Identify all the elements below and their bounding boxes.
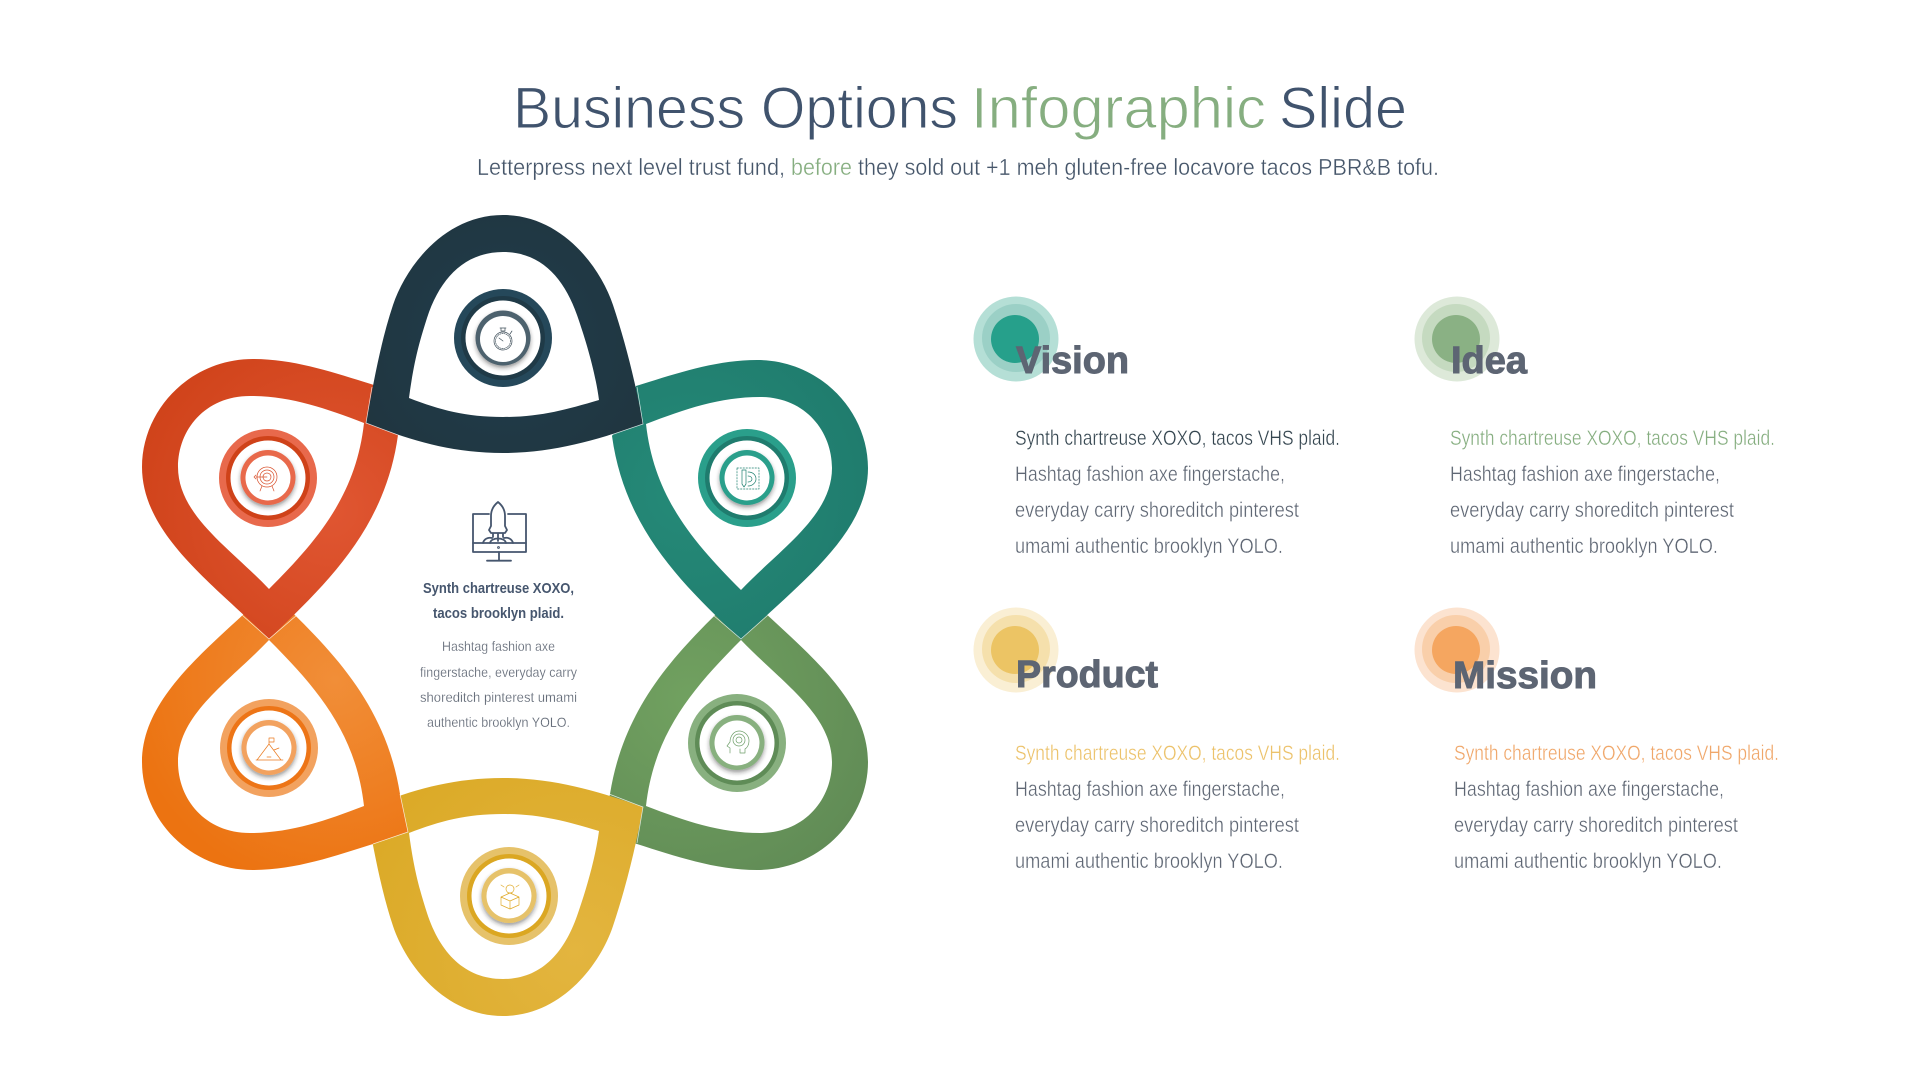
icon: teal circles	[974, 296, 1058, 382]
center body text: fingerstache, everyday carry	[420, 664, 577, 680]
title: Slide	[1279, 76, 1407, 141]
icon: orange circles	[1414, 608, 1500, 692]
badge: stopwatch	[454, 289, 552, 387]
text: vision copy: umami authentic brooklyn YOLO.	[1015, 535, 1283, 558]
title	[513, 76, 1407, 141]
petal: red	[142, 359, 398, 639]
text: vision copy: Hashtag fashion axe fingerstache,	[1015, 463, 1285, 486]
text: mission copy: umami authentic brooklyn YOLO.	[1454, 850, 1722, 873]
text: product copy: Hashtag fashion axe fingerstache,	[1015, 778, 1285, 801]
icon: green circles	[1414, 296, 1500, 382]
text: mission copy: everyday carry shoreditch pinterest	[1454, 814, 1738, 837]
text: vision copy: Synth chartreuse XOXO, tacos VHS plaid.	[1015, 427, 1340, 450]
text: idea copy: Synth chartreuse XOXO, tacos VHS plaid.	[1450, 427, 1775, 450]
text: mission copy: Hashtag fashion axe fingerstache,	[1454, 778, 1724, 801]
petal: green	[602, 590, 868, 870]
text: product copy: umami authentic brooklyn YOLO.	[1015, 850, 1283, 873]
center heading	[423, 580, 574, 622]
text: idea copy: Hashtag fashion axe fingerstache,	[1450, 463, 1720, 486]
subtitle: before	[791, 154, 852, 180]
icon: gear pencil	[737, 468, 759, 489]
heading: Product: Product	[1016, 654, 1158, 696]
text: product copy	[1015, 742, 1340, 873]
subtitle: they sold out +1 meh gluten-free locavore tacos PBR&B tofu.	[858, 154, 1439, 180]
icon: stopwatch	[494, 328, 512, 350]
center heading: tacos brooklyn plaid.	[433, 605, 564, 622]
badge: box bulb	[460, 847, 558, 945]
heading: Idea: Idea	[1451, 340, 1528, 382]
center heading: Synth chartreuse XOXO,	[423, 580, 574, 597]
subtitle	[477, 154, 1439, 180]
text: idea copy: umami authentic brooklyn YOLO.	[1450, 535, 1718, 558]
block: vision	[974, 296, 1340, 558]
petal: dark navy	[366, 215, 643, 453]
center body text: authentic brooklyn YOLO.	[427, 714, 570, 730]
heading: Mission: Mission	[1453, 655, 1597, 697]
badge: mountain flag	[220, 699, 318, 797]
petal: teal	[612, 360, 868, 640]
title: Infographic	[971, 76, 1266, 141]
text: mission copy: Synth chartreuse XOXO, tacos VHS plaid.	[1454, 742, 1779, 765]
center body text: Hashtag fashion axe	[442, 638, 555, 654]
subtitle: Letterpress next level trust fund,	[477, 154, 785, 180]
icon: head maze	[727, 731, 749, 753]
petal: yellow	[366, 778, 643, 1016]
text: product copy: Synth chartreuse XOXO, tacos VHS plaid.	[1015, 742, 1340, 765]
icon: yellow circles	[974, 608, 1058, 692]
title: Business Options	[513, 76, 958, 141]
text: vision copy: everyday carry shoreditch pinterest	[1015, 499, 1299, 522]
badge: target	[219, 429, 317, 527]
text: idea copy: everyday carry shoreditch pinterest	[1450, 499, 1734, 522]
icon: box bulb	[501, 885, 519, 909]
icon: target	[254, 467, 277, 491]
block: product	[974, 608, 1340, 873]
text: product copy: everyday carry shoreditch pinterest	[1015, 814, 1299, 837]
center body text: shoreditch pinterest umami	[420, 689, 577, 705]
badge: head maze	[688, 694, 786, 792]
text: vision copy	[1015, 427, 1340, 558]
heading: Vision: Vision	[1016, 340, 1129, 382]
block: idea	[1414, 296, 1775, 558]
petal diagram	[142, 215, 868, 1016]
text: mission copy	[1454, 742, 1779, 873]
block: mission	[1414, 608, 1779, 873]
center rocket icon	[473, 502, 526, 561]
text: idea copy	[1450, 427, 1775, 558]
icon: mountain flag	[256, 738, 283, 760]
center body text	[420, 638, 577, 730]
badge: gear pencil	[698, 429, 796, 527]
petal: orange	[142, 590, 408, 870]
